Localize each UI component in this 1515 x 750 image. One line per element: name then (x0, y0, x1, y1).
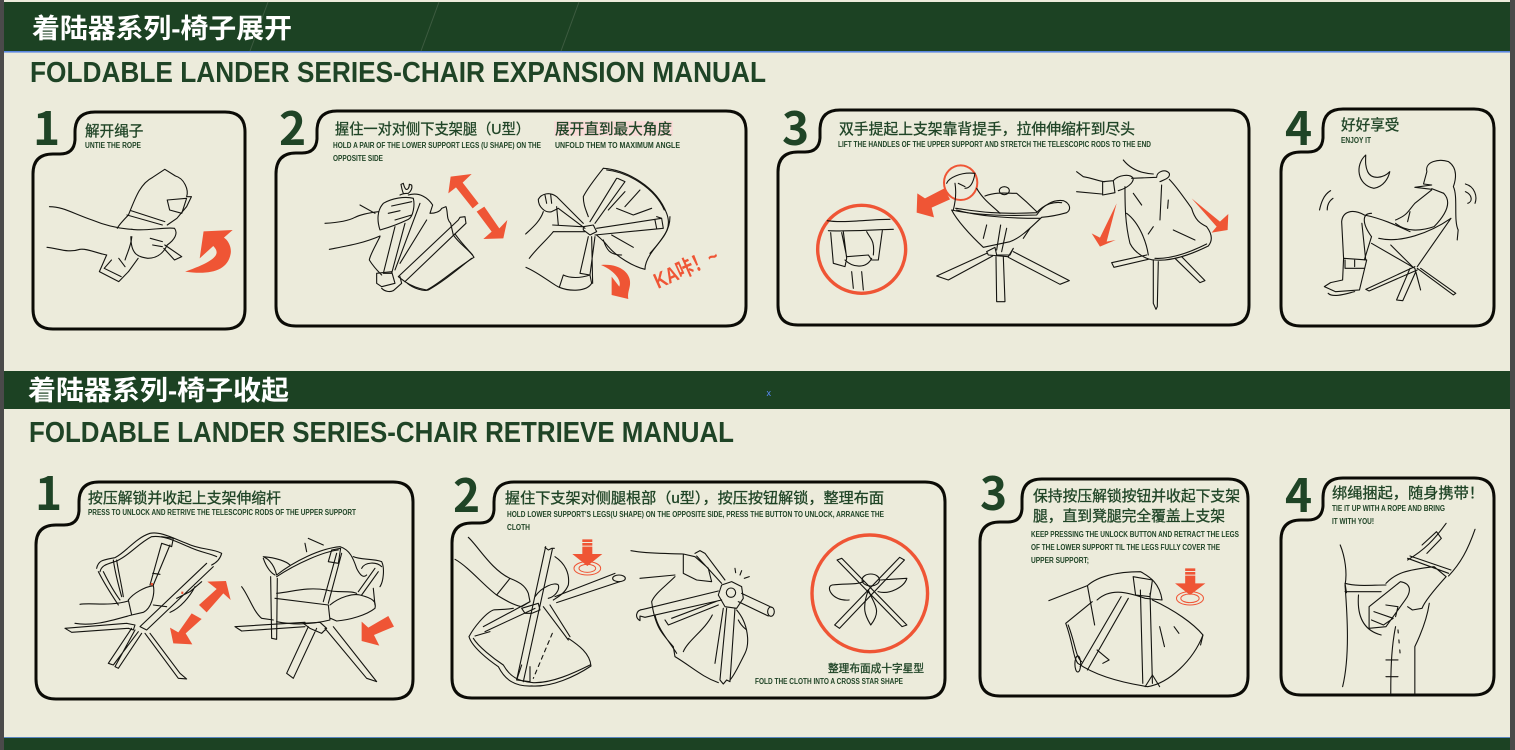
marker: blue x: x (766, 388, 772, 398)
arrow: double red (448, 174, 507, 239)
illustration: pressing hub button (631, 551, 774, 684)
retrieve step 3 english: OF THE LOWER SUPPORT TIL THE LEGS FULLY COVER THE (1031, 542, 1220, 552)
retrieve step 3 outline (980, 479, 1248, 696)
step 3 instruction: 双手提起上支架靠背提手，拉伸伸缩杆到尽头 (839, 121, 1135, 138)
number 1: 1 (33, 93, 60, 159)
step 4 english: ENJOY IT (1341, 135, 1372, 145)
arrow: curved red down (601, 265, 630, 299)
retrieve step 3 instruction (1033, 488, 1240, 525)
number 4: 4 (1285, 460, 1312, 526)
illustration: unfolded legs (526, 168, 670, 290)
arrow: press down with rings (1175, 568, 1205, 605)
panel: expansion step 4 (1281, 93, 1494, 326)
retrieve step 2 instruction: 握住下支架对侧腿根部（u型），按压按钮解锁，整理布面 (505, 490, 884, 507)
retrieve step 1 outline (36, 482, 413, 699)
retrieve step 2 english: HOLD LOWER SUPPORT'S LEGS(U SHAPE) ON THE OPPOSITE SIDE, PRESS THE BUTTON TO UNLOCK, ARRANGE THE (507, 509, 884, 519)
retrieve step 3 english: KEEP PRESSING THE UNLOCK BUTTON AND RETRACT THE LEGS (1031, 529, 1239, 539)
inset: cross star folded cloth (812, 535, 928, 652)
number 2: 2 (279, 93, 306, 159)
retrieve step 3 instruction: 保持按压解锁按钮并收起下支架 (1033, 488, 1240, 505)
cross star english: FOLD THE CLOTH INTO A CROSS STAR SHAPE (755, 676, 903, 686)
panel: expansion step 3 (778, 93, 1249, 325)
panel: expansion step 1 (33, 93, 245, 329)
header band: expansion (4, 2, 1510, 53)
retrieve step 2 english: CLOTH (507, 522, 530, 532)
arrow: curved red (185, 230, 233, 273)
step 2 outline (276, 111, 746, 326)
step 2 english: HOLD A PAIR OF THE LOWER SUPPORT LEGS (U SHAPE) ON THE (333, 140, 541, 150)
illustration: retracting legs (1049, 572, 1203, 687)
step 3 english: LIFT THE HANDLES OF THE UPPER SUPPORT AND STRETCH THE TELESCOPIC RODS TO THE END (838, 139, 1151, 149)
step 2 english: OPPOSITE SIDE (333, 153, 383, 163)
sound effect text: KA咔！~ (650, 243, 722, 294)
panel: expansion step 2 (276, 93, 746, 326)
cross star caption: 整理布面成十字星型 (828, 661, 924, 675)
step 2 english (333, 140, 680, 163)
heading: chair expansion Chinese: 着陆器系列-椅子展开 (32, 14, 292, 44)
retrieve step 3 english: UPPER SUPPORT; (1031, 555, 1089, 565)
retrieve step 1 instruction: 按压解锁并收起上支架伸缩杆 (88, 490, 281, 507)
illustration: pressing unlock on chair (65, 533, 231, 679)
retrieve step 4 instruction: 绑绳捆起，随身携带！ (1332, 485, 1484, 502)
step 4 outline (1281, 109, 1494, 326)
number 3: 3 (980, 458, 1007, 524)
step 3 outline (778, 110, 1249, 325)
retrieve step 4 english (1332, 503, 1445, 526)
retrieve step 3 english (1031, 529, 1239, 565)
step 1 english: UNTIE THE ROPE (85, 140, 141, 150)
step 1 instruction: 解开绳子 (85, 123, 143, 140)
highlight label: 展开直到最大角度 (555, 121, 672, 138)
illustration: chair lifted (917, 165, 1070, 302)
illustration: holding folded legs (325, 183, 474, 292)
retrieve step 4 english: IT WITH YOU! (1332, 516, 1374, 526)
illustration: hands untying rope (47, 169, 191, 282)
retrieve step 3 instruction: 腿，直到凳腿完全覆盖上支架 (1033, 507, 1225, 525)
inset: detail circle (818, 205, 906, 293)
heading: chair retrieve Chinese: 着陆器系列-椅子收起 (28, 376, 289, 406)
panel: retrieve step 3 (980, 458, 1248, 696)
number 3: 3 (782, 93, 809, 159)
footer band (4, 737, 1510, 750)
illustration: gripping legs and pressing (455, 537, 625, 686)
number 4: 4 (1285, 93, 1312, 159)
retrieve step 4 outline (1281, 478, 1494, 695)
panel: retrieve step 1 (35, 458, 413, 699)
arrow: press down with rings (572, 539, 602, 575)
retrieve step 2 english (507, 509, 884, 532)
number 2: 2 (453, 460, 480, 526)
illustration: stretching rods (1077, 160, 1228, 309)
retrieve step 4 english: TIE IT UP WITH A ROPE AND BRING (1332, 503, 1445, 513)
illustration: carrying folded chair (1340, 523, 1475, 693)
step 2 instruction: 握住一对对侧下支架腿（U型） (335, 121, 530, 138)
retrieve step 2 outline (452, 482, 945, 698)
header band: retrieve (4, 371, 1510, 409)
step 1 outline (33, 112, 245, 329)
title: retrieve manual: FOLDABLE LANDER SERIES-CHAIR RETRIEVE MANUAL (29, 417, 734, 449)
illustration: person relaxing in chair (1320, 155, 1476, 301)
title: expansion manual: FOLDABLE LANDER SERIES-CHAIR EXPANSION MANUAL (30, 57, 766, 89)
number 1: 1 (35, 458, 62, 524)
retrieve step 1 english: PRESS TO UNLOCK AND RETRIVE THE TELESCOPIC RODS OF THE UPPER SUPPORT (88, 507, 357, 517)
panel: retrieve step 4 (1281, 460, 1494, 695)
step 2 english: UNFOLD THEM TO MAXIMUM ANGLE (555, 140, 680, 150)
step 4 instruction: 好好享受 (1341, 117, 1399, 134)
panel: retrieve step 2 (452, 460, 945, 698)
illustration: retracted frame (235, 538, 394, 682)
